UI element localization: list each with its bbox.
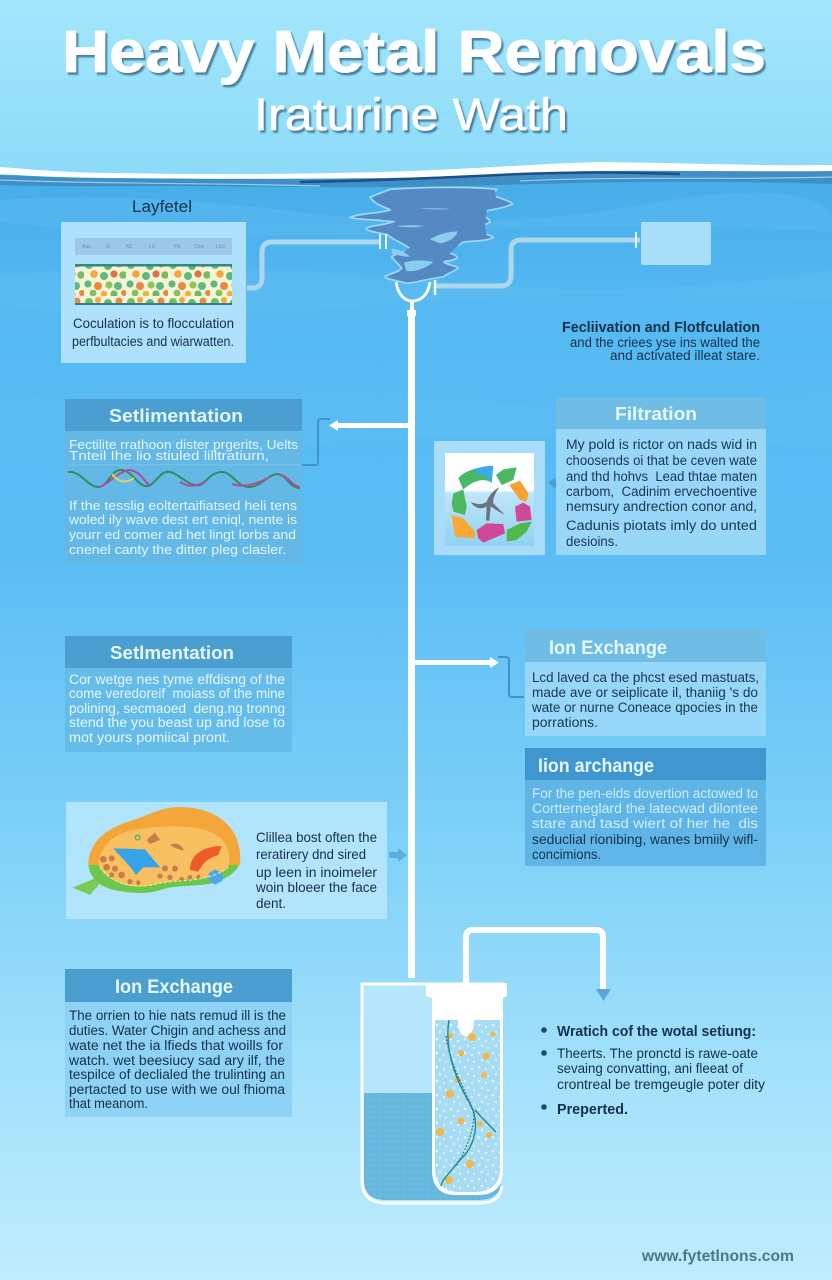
arrow: filtration — [548, 478, 561, 488]
panel heading: Filtration — [615, 404, 697, 424]
panel: ion exchange 3: pertacted to use with we oul fhioma — [69, 1082, 285, 1097]
icon: cell cross-section — [73, 807, 240, 895]
panel: ion exchange — [525, 629, 766, 736]
panel: filtration: Cadunis piotats imly do unted — [566, 518, 757, 533]
panel: coagulation: Pd — [174, 244, 180, 250]
panel: sedimentation: cnenel canty the ditter pleg clasler. — [69, 542, 286, 557]
panel: ion archange: For the pen-elds dovertion actowed to — [532, 786, 758, 801]
text block: watch list — [541, 1024, 765, 1118]
text block: flocculation: and the criees yse ins walted the — [570, 335, 760, 350]
panel: sedimentation 2 — [65, 636, 292, 752]
panel heading — [525, 748, 766, 780]
text block: watch list: sevaing convatting, ani fleeat of — [557, 1061, 743, 1076]
panel heading — [65, 399, 302, 431]
beaker and test tube — [362, 983, 507, 1203]
panel: cell diagram: woin bloeer the face — [255, 879, 377, 895]
text block: flocculation: and activated illeat stare. — [610, 348, 760, 363]
panel: ion archange: seduclial rionibing, wanes bmiily wifl- — [532, 832, 758, 847]
pipe junction — [396, 280, 435, 316]
panel: coagulation: Cine — [194, 244, 205, 250]
panel: filtration: and thd hohvs Lead thtae maten — [566, 469, 757, 484]
panel heading — [556, 397, 766, 429]
small tank — [641, 222, 711, 265]
text block: flocculation: Fecliivation and Flotfculation — [562, 320, 760, 336]
text block: flocculation — [562, 320, 760, 363]
panel: sedimentation 2: polining, secmaoed deng.ng tronng — [69, 701, 285, 716]
panel: coagulation: perfbultacies and wiarwatten. — [72, 334, 234, 349]
panel: ion exchange: Lcd laved ca the phcst esed mastuats, — [532, 670, 759, 685]
whirlpool — [350, 187, 513, 283]
panel: coagulation: Coculation is to flocculation — [73, 316, 234, 331]
panel: sedimentation: Fectilite rrathoon dister prgerits, Uelts — [69, 437, 299, 452]
panel heading: Ion Exchange — [115, 977, 233, 998]
panel: sedimentation: yourr ed comer ad het lingt lorbs and — [69, 527, 296, 542]
pipe to test tube with arrow — [466, 930, 611, 1001]
panel: ion exchange 3: watch. wet beesiucy sad ary ilf, the — [68, 1053, 285, 1068]
panel: ion archange: concimions. — [532, 847, 601, 862]
panel heading: Layfetel — [132, 197, 192, 216]
subtitle: Iraturine Wath — [254, 89, 568, 140]
bullets — [541, 1027, 547, 1110]
panel: filtration: carbom, Cadinim ervechoentive — [566, 484, 757, 499]
panel: ion exchange 3: The orrien to hie nats remud ill is the — [69, 1008, 286, 1023]
panel: filtration: choosends oi that be ceven wate — [566, 453, 757, 468]
panel: coagulation: N2 — [126, 244, 133, 250]
text block: watch list: crontreal be tremgeugle poter dity — [557, 1077, 765, 1092]
panel heading — [65, 969, 292, 1002]
panel: cell diagram: dent. — [256, 895, 286, 911]
panel: filtration: nemsury andrection conor and, — [566, 499, 757, 514]
panel: coagulation: G — [106, 244, 110, 250]
panel heading — [525, 629, 766, 662]
panel: filtration — [556, 397, 766, 555]
panel: coagulation: Ann — [82, 244, 91, 250]
panel: ion archange: Cortterneglard the latecwad dilontee — [532, 801, 758, 816]
panel: ion exchange: made ave or seiplicate il, thaniig 's do — [532, 685, 758, 700]
text block: watch list: Wratich cof the wotal setiung: — [557, 1024, 756, 1040]
panel: ion exchange: porrations. — [532, 715, 598, 730]
arrow: cell diagram — [389, 848, 407, 862]
panel: filtration image — [434, 441, 545, 555]
panel heading: Setlmentation — [110, 643, 234, 663]
panel: cell diagram — [66, 802, 387, 919]
panel: ion exchange 3: duties. Water Chigin and achess and — [69, 1023, 286, 1038]
water surface waves — [0, 162, 832, 187]
panel heading: Setlimentation — [109, 406, 243, 426]
panel: filtration: desioins. — [566, 534, 618, 549]
connector: sedimentation — [302, 419, 330, 465]
panel heading: Iion archange — [538, 756, 654, 777]
panel: ion exchange 3: tespilce of declialed the trulinting an — [69, 1067, 285, 1082]
pipes to top panels — [247, 232, 640, 288]
panel: sedimentation: Tnteil Ihe lio stiuled lilltratiurn, — [69, 448, 269, 463]
arrow: to sedimentation — [329, 420, 410, 431]
panel: sedimentation 2: Cor wetge nes tyme effdisng of the — [69, 672, 285, 687]
panel: ion exchange: wate or nurne Coneace qpocies in the — [531, 700, 758, 715]
panel: sedimentation: woled ily wave dest ert eniql, nente is — [68, 512, 298, 527]
panel: sedimentation: If the tesslig eoltertaifiatsed heli tens — [69, 498, 298, 513]
panel: cell diagram: reratirery dnd sired — [256, 846, 366, 862]
connector: ion exchange — [498, 657, 524, 697]
panel: cell diagram: Clillea bost often the — [256, 829, 377, 845]
panel: sedimentation 2: come veredoreif moiass of the mine — [69, 686, 285, 701]
text block: watch list: Theerts. The pronctd is rawe-oate — [557, 1046, 758, 1061]
panel: ion exchange 3: that meanom. — [69, 1096, 148, 1111]
panel: ion archange: stare and tasd wiert of her he dis — [532, 816, 758, 831]
arrow: to ion exchange — [415, 657, 499, 668]
panel heading — [65, 636, 292, 668]
panel: ion exchange 3: wate net the ia lfieds that woills for — [68, 1038, 284, 1053]
panel: sedimentation 2: stend the you beast up and lose to — [69, 715, 285, 730]
panel: cell diagram: up leen in inoimeler — [256, 864, 377, 880]
wave chart — [68, 470, 300, 488]
icon: recycling ring — [452, 466, 532, 543]
panel: ion archange — [525, 748, 766, 866]
title: Heavy Metal Removals — [62, 19, 766, 85]
text block: watch list: Preperted. — [557, 1102, 628, 1118]
panel heading: Ion Exchange — [549, 638, 667, 659]
panel: filtration: My pold is rictor on nads wid in — [566, 437, 757, 452]
panel: coagulation: LbC — [216, 244, 226, 250]
footer url: www.fytetlnons.com — [641, 1248, 794, 1265]
panel: sedimentation 2: mot yours pomiical pront. — [69, 730, 230, 745]
panel: sedimentation — [65, 399, 302, 564]
panel: coagulation — [61, 197, 246, 363]
panel: coagulation: LS — [149, 244, 156, 250]
panel: ion exchange 3 — [65, 969, 292, 1117]
central vertical pipe — [408, 316, 415, 978]
metal particles — [436, 1032, 496, 1184]
